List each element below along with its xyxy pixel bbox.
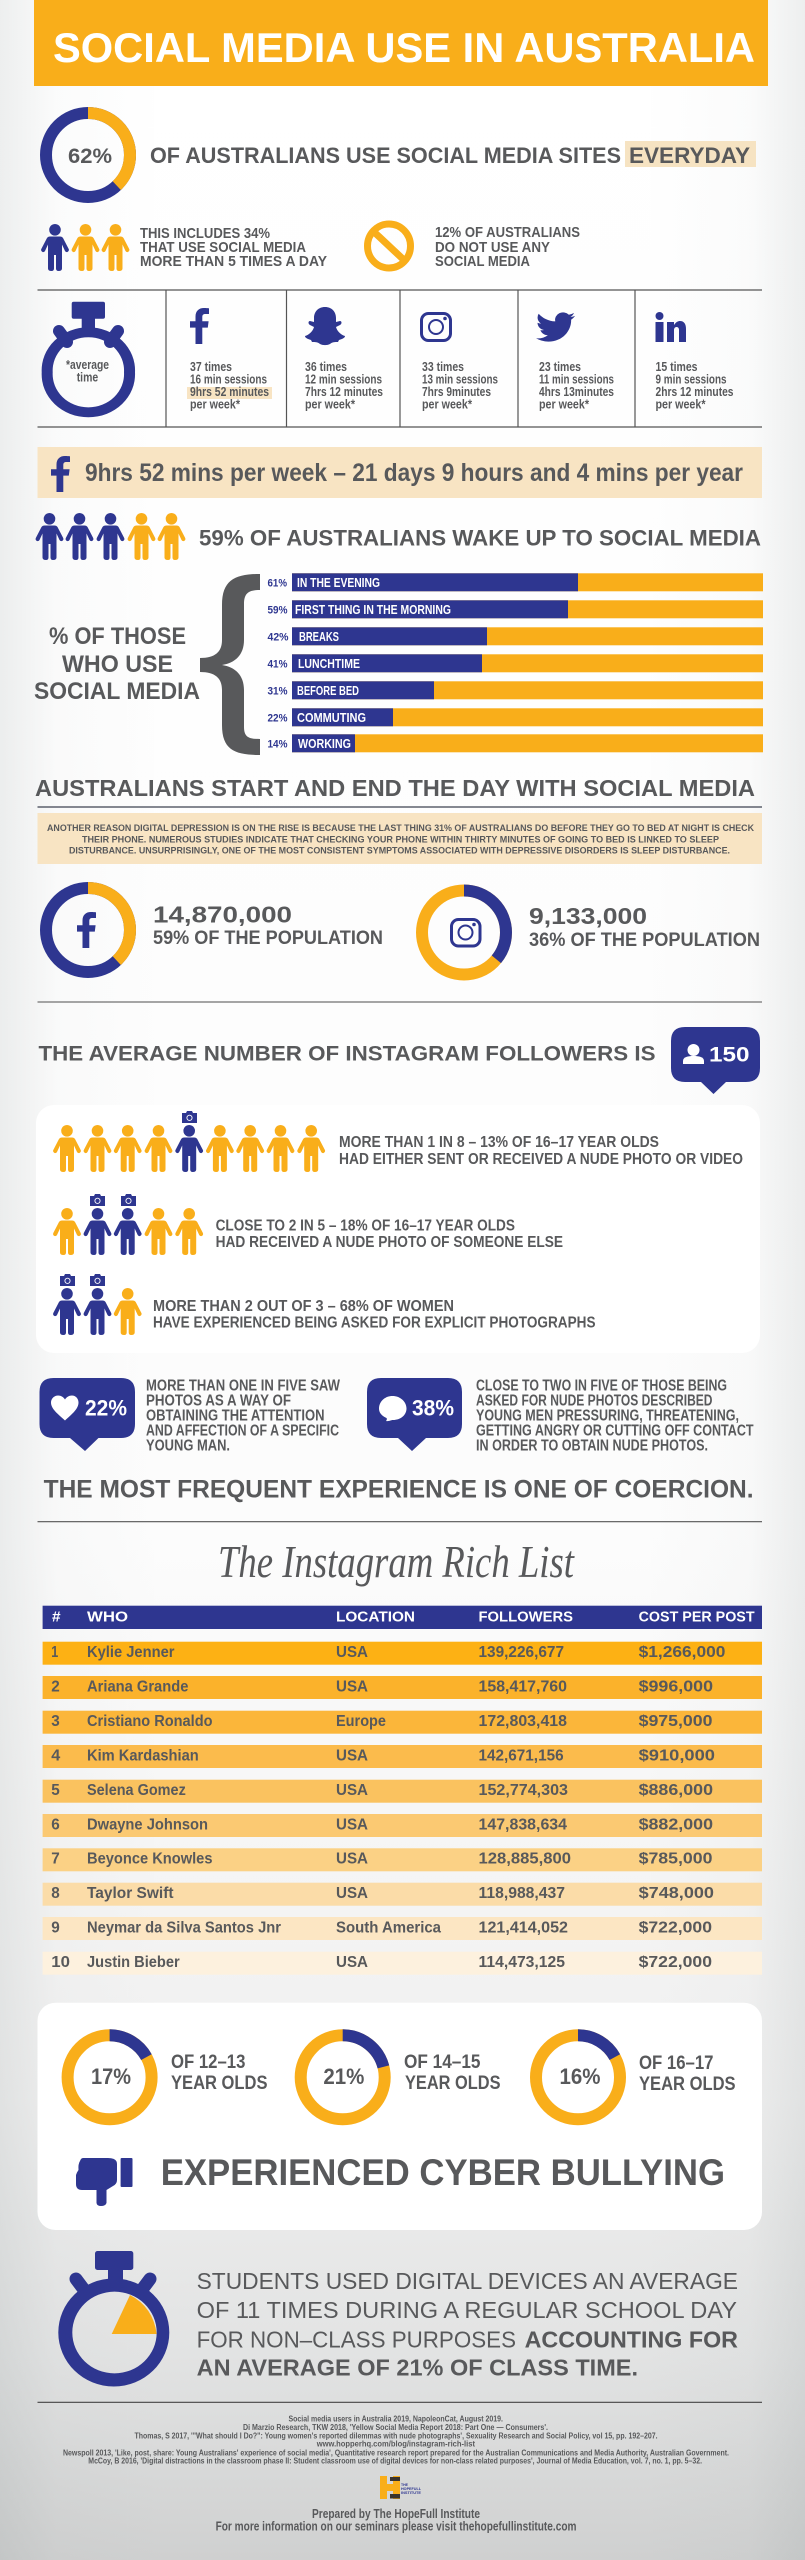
column: linkedin xyxy=(656,312,734,412)
table header: FOLLOWERS xyxy=(478,1610,573,1626)
column: instagram: 7hrs 9minutes xyxy=(422,385,491,399)
stat: instagram population: 9,133,000 xyxy=(529,903,647,929)
panel: platform usage table frame xyxy=(38,290,762,427)
heading: wake up to social media: 59% OF AUSTRALIANS WAKE UP TO SOCIAL MEDIA xyxy=(199,526,761,551)
text: 12 percent xyxy=(435,224,580,270)
label: 14-15 year olds: OF 14–15 xyxy=(404,2052,481,2073)
row 4: USA xyxy=(336,1747,368,1764)
bar chart: when social media is used: 22% xyxy=(268,712,288,724)
bar chart: when social media is used: 31% xyxy=(268,685,288,697)
row 9: 9 xyxy=(51,1919,60,1936)
text: references: Newspoll 2013, 'Like, post, share: Young Australians' experience of social media', Quantitative research report prepared for the Australian Communications and Media Authority, Australian Government. xyxy=(63,2448,729,2457)
row 9: South America xyxy=(336,1919,441,1936)
row 5: $886,000 xyxy=(639,1782,713,1799)
icon: three people xyxy=(41,224,129,271)
label: percent of those who use social media: WHO USE xyxy=(62,651,173,678)
column: facebook xyxy=(187,308,272,412)
callout bubble: 150 followers xyxy=(671,1027,760,1094)
bar chart: when social media is used: 42% xyxy=(268,631,289,643)
icon: curly brace xyxy=(200,574,260,755)
row 9 xyxy=(43,1917,762,1940)
row 1: Kylie Jenner xyxy=(87,1644,174,1661)
panel: cyber bullying xyxy=(38,2003,762,2230)
heading: the instagram rich list: The Instagram Rich List xyxy=(218,1536,575,1587)
row 2: 2 xyxy=(51,1678,60,1695)
text: 34 percent xyxy=(140,225,327,270)
label: 12-13 year olds: OF 12–13 xyxy=(171,2052,245,2073)
headline: everyday use: OF AUSTRALIANS USE SOCIAL MEDIA SITES xyxy=(150,143,621,168)
row 10: Justin Bieber xyxy=(87,1954,180,1971)
row 5: USA xyxy=(336,1782,368,1799)
row 2: USA xyxy=(336,1678,368,1695)
bar chart: when social media is used: 41% xyxy=(268,658,288,670)
row: 1 in 8 xyxy=(53,1111,743,1172)
row 3: Cristiano Ronaldo xyxy=(87,1713,212,1730)
bar chart: when social media is used: BEFORE BED xyxy=(297,684,359,698)
callout: digital depression: DISTURBANCE. UNSURPRISINGLY, ONE OF THE MOST CONSISTENT SYMPTOMS ASSOCIATED WITH DEPRESSIVE DISORDERS IS SLEEP DISTURBANCE. xyxy=(69,846,730,856)
column: twitter xyxy=(536,312,614,412)
row 3 xyxy=(43,1711,762,1734)
panel: nude photo statistics xyxy=(36,1105,760,1353)
row 3: 3 xyxy=(51,1713,60,1730)
bar chart: when social media is used: BREAKS xyxy=(299,630,339,644)
icon: five people xyxy=(36,513,185,560)
row 2: $996,000 xyxy=(639,1678,713,1695)
text: pressure for nude photos: YOUNG MEN PRESSURING, THREATENING, xyxy=(476,1408,739,1425)
heading: average instagram followers: THE AVERAGE NUMBER OF INSTAGRAM FOLLOWERS IS xyxy=(38,1042,656,1066)
callout: digital depression xyxy=(38,813,762,864)
bar chart: when social media is used: FIRST THING IN THE MORNING xyxy=(295,603,451,617)
text: pressure for nude photos: IN ORDER TO OBTAIN NUDE PHOTOS. xyxy=(476,1438,708,1455)
row 7: 128,885,800 xyxy=(478,1851,571,1868)
row 1 xyxy=(43,1642,762,1665)
row 8: 118,988,437 xyxy=(478,1885,565,1902)
column: twitter: 11 min sessions xyxy=(539,372,614,386)
column: facebook: 16 min sessions xyxy=(190,372,267,386)
text: attention and affection: AND AFFECTION OF A SPECIFIC xyxy=(146,1423,339,1440)
row: 2 out of 3 xyxy=(53,1274,596,1335)
callout bubble: 38 percent speech: 38% xyxy=(412,1396,454,1421)
row 9: 121,414,052 xyxy=(478,1919,568,1936)
bar chart: when social media is used: COMMUTING xyxy=(297,711,366,725)
row 7: Beyonce Knowles xyxy=(87,1851,212,1868)
column: facebook: per week* xyxy=(190,398,240,412)
column: snapchat: 12 min sessions xyxy=(305,372,382,386)
table header: LOCATION xyxy=(336,1610,415,1626)
label: 16-17 year olds: YEAR OLDS xyxy=(639,2074,736,2095)
row 5 xyxy=(43,1780,762,1803)
callout bubble: 150 followers: 150 xyxy=(709,1044,750,1067)
row 8: 8 xyxy=(51,1885,60,1902)
row 2: Ariana Grande xyxy=(87,1678,189,1695)
label: percent of those who use social media xyxy=(34,623,200,705)
donut: 16 percent: 16% xyxy=(560,2064,600,2089)
row 1: $1,266,000 xyxy=(639,1644,725,1661)
stat: instagram population xyxy=(529,903,760,951)
row 8: $748,000 xyxy=(639,1885,714,1902)
row 8: USA xyxy=(336,1885,368,1902)
column: instagram: 33 times xyxy=(422,360,464,374)
label: 12-13 year olds: YEAR OLDS xyxy=(171,2073,268,2094)
callout bubble: 22 percent heart xyxy=(40,1378,135,1451)
row 10 xyxy=(43,1952,762,1975)
footer: prepared by: For more information on our seminars please visit thehopefullinstitute.com xyxy=(216,2519,576,2534)
column: linkedin: 2hrs 12 minutes xyxy=(656,385,734,399)
logo: the hopefull institute: THE xyxy=(401,2483,409,2487)
row 5: Selena Gomez xyxy=(87,1782,186,1799)
text: references: McCoy, B 2016, 'Digital distractions in the classroom phase II: Student classroom use of digital devices for non-class related purposes', Journal of Media Education, vol. 7, no. 1, pp. 5–32. xyxy=(88,2457,702,2466)
row 3: $975,000 xyxy=(639,1713,712,1730)
column: snapchat xyxy=(305,307,383,412)
bar chart: when social media is used: IN THE EVENING xyxy=(297,576,380,590)
icon: stopwatch average time: *average xyxy=(66,358,109,372)
footer: prepared by: Prepared by The HopeFull Institute xyxy=(312,2506,480,2521)
row 10: $722,000 xyxy=(639,1954,712,1971)
row 4: 4 xyxy=(51,1747,61,1764)
column: facebook: 37 times xyxy=(190,360,232,374)
row 7: 7 xyxy=(51,1851,60,1868)
row: 1 in 8: MORE THAN 1 IN 8 – 13% OF 16–17 YEAR OLDS xyxy=(339,1134,659,1151)
column: twitter: 23 times xyxy=(539,360,581,374)
row 8: Taylor Swift xyxy=(87,1885,174,1902)
title banner xyxy=(34,0,768,86)
text: attention and affection: MORE THAN ONE IN FIVE SAW xyxy=(146,1378,340,1395)
column: twitter: per week* xyxy=(539,398,589,412)
bar chart: when social media is used: 59% xyxy=(268,604,288,616)
row 6: Dwayne Johnson xyxy=(87,1816,208,1833)
column: instagram: per week* xyxy=(422,398,472,412)
icon: stopwatch average time xyxy=(42,302,135,417)
label: 16-17 year olds xyxy=(639,2053,736,2095)
callout bubble: 22 percent heart: 22% xyxy=(85,1396,127,1421)
donut: 62 percent daily users xyxy=(46,113,130,197)
row 10: USA xyxy=(336,1954,368,1971)
row 4: $910,000 xyxy=(639,1747,715,1764)
text: 12 percent: SOCIAL MEDIA xyxy=(435,253,530,270)
icon: thumbs down xyxy=(76,2158,132,2206)
row 5: 5 xyxy=(51,1782,60,1799)
heading: experienced cyber bullying: EXPERIENCED CYBER BULLYING xyxy=(161,2152,725,2193)
donut: 62 percent daily users: 62% xyxy=(68,145,112,168)
row 7: $785,000 xyxy=(639,1851,712,1868)
column: linkedin: 15 times xyxy=(656,360,698,374)
text: references: www.hopperhq.com/blog/instagram-rich-list xyxy=(316,2440,475,2449)
row 4: Kim Kardashian xyxy=(87,1747,199,1764)
label: 12-13 year olds xyxy=(171,2052,268,2094)
column: snapchat: 36 times xyxy=(305,360,347,374)
row 8 xyxy=(43,1883,762,1906)
table header: COST PER POST xyxy=(639,1610,755,1626)
text: references: Social media users in Australia 2019, NapoleonCat, August 2019. xyxy=(288,2415,503,2424)
row 2: 158,417,760 xyxy=(478,1678,567,1695)
row 9: $722,000 xyxy=(639,1919,712,1936)
headline: everyday use: EVERYDAY xyxy=(629,143,750,168)
heading: start and end the day: AUSTRALIANS START AND END THE DAY WITH SOCIAL MEDIA xyxy=(35,775,755,801)
logo: the hopefull institute: INSTITUTE xyxy=(401,2491,422,2495)
text: references: Di Marzio Research, TKW 2018, 'Yellow Social Media Report 2018: Part One — Consumers'. xyxy=(243,2423,548,2432)
icon: prohibited sign xyxy=(368,224,410,268)
stat: facebook population: 59% OF THE POPULATION xyxy=(153,927,383,949)
bar chart: when social media is used: LUNCHTIME xyxy=(298,657,360,671)
label: 14-15 year olds: YEAR OLDS xyxy=(405,2073,500,2094)
row 10: 10 xyxy=(51,1954,70,1971)
banner: facebook time per year xyxy=(38,447,762,498)
callout bubble: 38 percent speech xyxy=(367,1378,462,1451)
row 6: 147,838,634 xyxy=(478,1816,567,1833)
bar chart: when social media is used: 61% xyxy=(268,577,287,589)
bar chart: when social media is used: 14% xyxy=(268,738,288,750)
text: references: Thomas, S 2017, '"What should I Do?": Young women's reported dilemmas with nude photographs', Sexuality Research and Social Policy, vol 15, pp. 192–207. xyxy=(134,2431,658,2440)
row: 2 in 5 xyxy=(53,1194,563,1255)
row 4 xyxy=(43,1745,762,1768)
text: digital devices in class: FOR NON–CLASS PURPOSES xyxy=(197,2326,516,2352)
row: 2 in 5: CLOSE TO 2 IN 5 – 18% OF 16–17 YEAR OLDS xyxy=(216,1218,515,1235)
row 3: 172,803,418 xyxy=(478,1713,567,1730)
column: linkedin: per week* xyxy=(656,398,706,412)
donut: 16 percent xyxy=(536,2035,620,2119)
icon: stopwatch average time: time xyxy=(77,371,98,385)
row 5: 152,774,303 xyxy=(478,1782,568,1799)
donut: facebook 59 percent xyxy=(46,888,130,972)
column: linkedin: 9 min sessions xyxy=(656,372,727,386)
row 4: 142,671,156 xyxy=(478,1747,564,1764)
row 1: 1 xyxy=(51,1644,59,1661)
banner: facebook time per year: 9hrs 52 mins per week – 21 days 9 hours and 4 mins per year xyxy=(85,459,743,487)
label: 14-15 year olds xyxy=(404,2052,500,2094)
table header: WHO xyxy=(87,1610,128,1626)
label: percent of those who use social media: % OF THOSE xyxy=(49,623,186,650)
text: 34 percent: THAT USE SOCIAL MEDIA xyxy=(140,239,306,256)
text: attention and affection: OBTAINING THE ATTENTION xyxy=(146,1408,324,1425)
heading: coercion: THE MOST FREQUENT EXPERIENCE IS ONE OF COERCION. xyxy=(44,1476,754,1504)
row 7 xyxy=(43,1848,762,1871)
text: digital devices in class: STUDENTS USED DIGITAL DEVICES AN AVERAGE xyxy=(197,2268,738,2294)
row 3: Europe xyxy=(336,1713,386,1730)
text: 12 percent: DO NOT USE ANY xyxy=(435,239,550,256)
text: pressure for nude photos xyxy=(476,1378,754,1455)
donut: instagram 36 percent xyxy=(422,890,506,974)
donut: 17 percent xyxy=(68,2035,152,2119)
callout: digital depression: THEIR PHONE. NUMEROUS STUDIES INDICATE THAT CHECKING YOUR PHONE WITHIN THIRTY MINUTES OF GOING TO BED IS LINKED TO SLEEP xyxy=(82,834,720,846)
callout: digital depression: ANOTHER REASON DIGITAL DEPRESSION IS ON THE RISE IS BECAUSE THE LAST THING 31% OF AUSTRALIANS DO BEFORE THEY GO TO BED AT NIGHT IS CHECK xyxy=(47,823,754,834)
donut: 21 percent xyxy=(301,2035,385,2119)
row 1: USA xyxy=(336,1644,368,1661)
stat: instagram population: 36% OF THE POPULATION xyxy=(529,929,760,951)
row 6: $882,000 xyxy=(639,1816,713,1833)
stat: facebook population xyxy=(153,902,383,949)
text: 12 percent: 12% OF AUSTRALIANS xyxy=(435,224,580,241)
column: instagram xyxy=(422,314,498,412)
row: 2 in 5: HAD RECEIVED A NUDE PHOTO OF SOMEONE ELSE xyxy=(216,1234,563,1251)
row 9: Neymar da Silva Santos Jnr xyxy=(87,1919,281,1936)
bar chart: when social media is used xyxy=(268,573,763,752)
column: facebook: 9hrs 52 minutes xyxy=(190,385,269,399)
row 6: USA xyxy=(336,1816,368,1833)
text: digital devices in class xyxy=(197,2268,738,2381)
text: digital devices in class: AN AVERAGE OF 21% OF CLASS TIME. xyxy=(197,2355,638,2381)
text: references xyxy=(63,2415,729,2466)
title banner: SOCIAL MEDIA USE IN AUSTRALIA xyxy=(53,24,755,71)
row: 1 in 8: HAD EITHER SENT OR RECEIVED A NUDE PHOTO OR VIDEO xyxy=(339,1151,743,1168)
donut: 21 percent: 21% xyxy=(323,2064,364,2089)
column: instagram: 13 min sessions xyxy=(422,372,498,386)
row 10: 114,473,125 xyxy=(478,1954,565,1971)
logo: the hopefull institute: HOPEFULL xyxy=(401,2487,422,2491)
row 7: USA xyxy=(336,1851,368,1868)
text: attention and affection xyxy=(146,1378,340,1455)
row 2 xyxy=(43,1676,762,1699)
text: attention and affection: PHOTOS AS A WAY OF xyxy=(146,1393,291,1410)
column: twitter: 4hrs 13minutes xyxy=(539,385,614,399)
text: digital devices in class: ACCOUNTING FOR xyxy=(525,2326,738,2352)
column: snapchat: per week* xyxy=(305,398,355,412)
text: digital devices in class: OF 11 TIMES DURING A REGULAR SCHOOL DAY xyxy=(197,2297,737,2323)
stat: facebook population: 14,870,000 xyxy=(153,902,292,928)
table header xyxy=(43,1606,762,1629)
column: snapchat: 7hrs 12 minutes xyxy=(305,385,383,399)
footer: prepared by xyxy=(216,2506,576,2534)
label: percent of those who use social media: SOCIAL MEDIA xyxy=(34,678,200,705)
text: pressure for nude photos: ASKED FOR NUDE PHOTOS DESCRIBED xyxy=(476,1393,712,1410)
text: 34 percent: MORE THAN 5 TIMES A DAY xyxy=(140,253,327,270)
row: 2 out of 3: HAVE EXPERIENCED BEING ASKED FOR EXPLICIT PHOTOGRAPHS xyxy=(153,1315,596,1332)
text: 34 percent: THIS INCLUDES 34% xyxy=(140,225,270,242)
table header: # xyxy=(52,1610,61,1626)
text: pressure for nude photos: CLOSE TO TWO IN FIVE OF THOSE BEING xyxy=(476,1378,727,1395)
row 6: 6 xyxy=(51,1816,60,1833)
text: attention and affection: YOUNG MAN. xyxy=(146,1438,230,1455)
table: instagram rich list xyxy=(43,1606,762,1975)
bar chart: when social media is used: WORKING xyxy=(298,737,351,751)
icon: stopwatch class time xyxy=(58,2251,169,2386)
donut: 17 percent: 17% xyxy=(91,2064,131,2089)
row 6 xyxy=(43,1814,762,1837)
row: 2 out of 3: MORE THAN 2 OUT OF 3 – 68% OF WOMEN xyxy=(153,1298,454,1315)
row 1: 139,226,677 xyxy=(478,1644,564,1661)
logo: the hopefull institute xyxy=(380,2476,422,2499)
label: 16-17 year olds: OF 16–17 xyxy=(639,2053,714,2074)
